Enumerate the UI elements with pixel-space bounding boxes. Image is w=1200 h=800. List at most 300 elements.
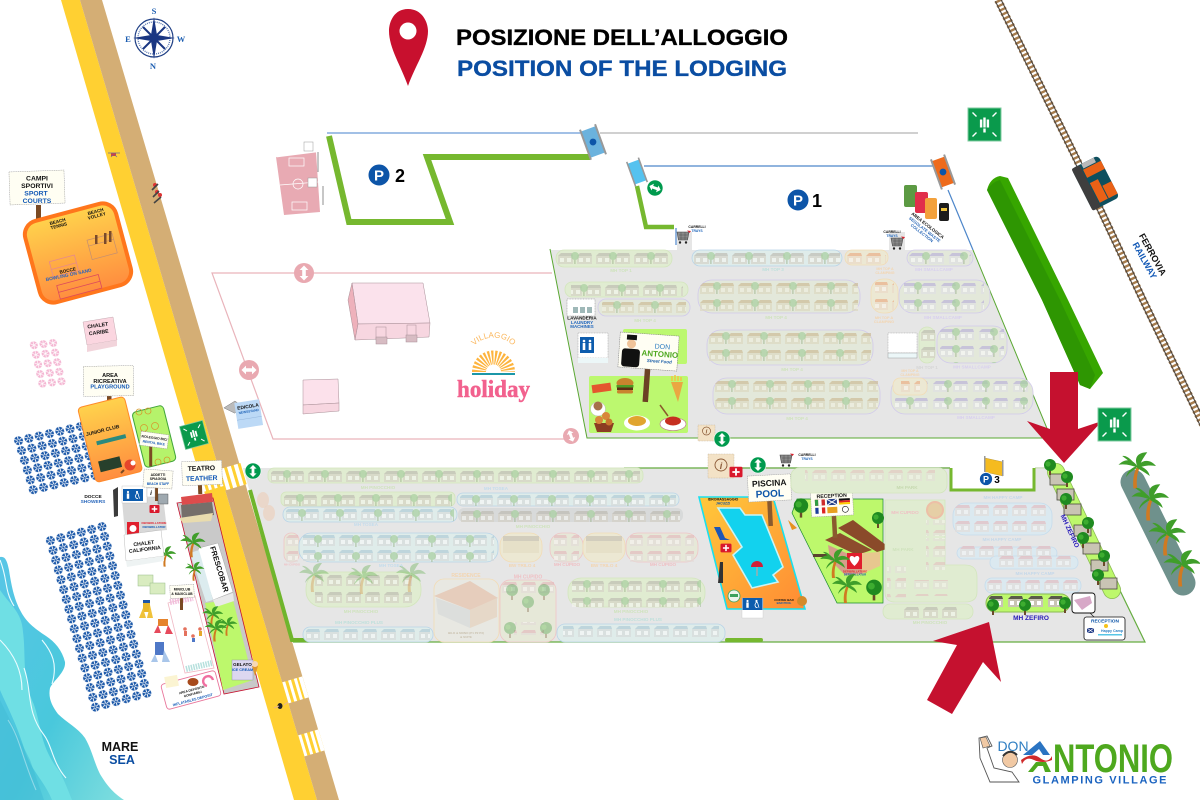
label: MH TOSEA	[484, 486, 509, 491]
fence top	[170, 598, 193, 602]
crosswalk middle	[280, 676, 309, 704]
icon: assembly point east	[1098, 408, 1131, 441]
label: railway: FERROVIA	[1137, 232, 1169, 278]
label	[900, 369, 920, 377]
pill: smallcamp north	[907, 250, 973, 266]
label: MH SMALLCAMP	[915, 267, 953, 272]
hedge: railway side	[987, 176, 1103, 389]
icon: info sign upper: i	[706, 430, 708, 436]
label: bocce: BOWLING ON SAND	[45, 268, 93, 283]
icon: first aid	[150, 505, 160, 513]
label: FRESCOBAR	[208, 545, 231, 594]
house	[813, 520, 890, 575]
trees	[794, 498, 884, 603]
crosswalk teatro	[190, 478, 223, 495]
label: beach volley: BEACH	[87, 207, 105, 216]
label: railway: RAILWAY	[1131, 241, 1159, 281]
man waving	[979, 736, 1019, 782]
icon: disabled badge	[728, 590, 740, 602]
icon: compass	[125, 6, 186, 71]
lawn	[205, 600, 253, 690]
panel: bike rental	[132, 405, 177, 468]
sign: theatre: TEATRO	[188, 465, 215, 473]
label: MH PINOCCHIO	[614, 609, 649, 614]
label: beach volley: VOLLEY	[87, 211, 106, 221]
label: sea	[102, 740, 138, 767]
label: MH CUPIDO	[891, 510, 919, 516]
pill: pinocchio south	[883, 604, 973, 619]
pill: happy camp 2	[957, 544, 1078, 570]
label: MH Zefiro: MH ZEFIRO	[1013, 615, 1049, 622]
building: chalet caribe	[83, 317, 117, 352]
road: beach promenade and tan path	[61, 0, 339, 800]
label: P1	[787, 189, 822, 211]
label: CLAMPING	[874, 320, 894, 324]
icon: drone	[108, 153, 120, 157]
sign: sport courts: CAMPI	[26, 176, 48, 182]
icon: bread basket	[594, 412, 614, 432]
icon: green arrow	[245, 463, 261, 479]
panel: sports area	[22, 200, 134, 306]
pill: pinocchio with palms	[306, 572, 421, 607]
restrooms upper	[578, 333, 608, 363]
label: MH TOSEA	[354, 522, 379, 527]
label: P2	[368, 164, 405, 186]
laundry	[567, 299, 597, 329]
label: P3: P	[983, 474, 989, 484]
sign: beach staff: BEACH STAFF	[147, 482, 169, 486]
icon: pizza	[592, 383, 611, 393]
sign: reception: RECEPTION	[816, 493, 847, 500]
pill: clamping north	[845, 250, 888, 265]
building: chalet california: CHALET	[133, 540, 156, 548]
frescobar building	[190, 543, 234, 607]
pill: clamping south	[893, 378, 927, 395]
sign: theatre	[182, 460, 223, 495]
label	[875, 267, 895, 275]
label: MH TOP A	[875, 316, 893, 320]
label: beach tennis: TENNIS	[50, 221, 68, 230]
label	[843, 570, 867, 576]
sign: Don Antonio street food: Street Food	[647, 358, 672, 365]
arrow: red down	[1027, 372, 1102, 463]
label: MH TOP 1	[610, 268, 632, 273]
sign: beach staff	[143, 469, 173, 501]
icon: cupido badge	[927, 502, 943, 518]
sign: mini club: & MAXICLUB	[171, 592, 193, 596]
icon: info sign lower: i	[720, 461, 723, 471]
label: MH CUPIDO	[514, 574, 542, 580]
label: beach volley	[86, 207, 106, 221]
label: CLAMPING	[900, 373, 920, 377]
label: defibrillator: DEFIBRILLATOR	[142, 525, 166, 529]
icon: pasta	[660, 405, 686, 430]
icon: shower heads	[113, 487, 118, 517]
icon: first aid	[730, 467, 742, 477]
lines: parking 1 perimeter	[644, 166, 973, 250]
kiosk: edicola: NEWSSTAND	[238, 408, 260, 415]
label: defibrillator: DEFIBRILLATORE	[142, 521, 167, 525]
bowling lanes	[57, 274, 102, 299]
label: ecological area	[905, 211, 946, 248]
label: junior club: JUNIOR CLUB	[85, 424, 120, 438]
residence	[434, 573, 499, 642]
icon: location pin	[389, 9, 428, 86]
icon: pink arrow west	[239, 360, 259, 380]
pill: MH TOP 1 north	[556, 250, 672, 267]
icon: slide two	[154, 619, 173, 634]
sign: pool: POOL	[755, 488, 784, 501]
label: ecological area: SEGGLATE WASTE	[908, 215, 942, 243]
label: trays: CARRELLI	[798, 453, 816, 457]
palms: beach	[155, 533, 237, 642]
sign: playground: RICREATIVA	[93, 379, 127, 385]
sign: sport courts: COURTS	[23, 198, 52, 205]
panel: street food lawn	[589, 375, 688, 433]
pill: pinocchio top	[268, 467, 643, 483]
label: trays: TRAYS	[691, 229, 703, 233]
sign: bike rental: RENTAL BIKE	[142, 439, 166, 447]
label: MH PINOCCHIO	[516, 524, 551, 529]
pill: zefiro diagonal	[1044, 459, 1117, 590]
umbrellas: blue group north	[12, 420, 102, 496]
label: MH TOP 3	[762, 267, 784, 272]
theatre	[179, 493, 214, 523]
label: trays: TRAYS	[886, 234, 898, 238]
label: MH TOP 4	[634, 318, 656, 323]
panel: inflatables: AREA DEPOSITO	[179, 685, 205, 695]
pill: tosea row 4	[299, 533, 498, 562]
label: MH SMALLCAMP	[953, 364, 991, 370]
panel: mini club	[168, 596, 214, 673]
label: MH SMALLCAMP	[924, 315, 962, 320]
label: coffee bar	[774, 598, 795, 605]
railway	[995, 0, 1200, 436]
pill: MH TOP 4 large	[698, 280, 860, 313]
tennis net	[49, 255, 79, 277]
kiosk: gelato: ICE CREAM	[232, 668, 253, 672]
laundry: LAVANDERIA	[567, 316, 597, 320]
pool water	[718, 508, 783, 588]
label: showers	[81, 494, 106, 505]
building: fresco bar area	[177, 493, 259, 694]
site: upper camping area	[550, 232, 1051, 438]
box: reception Happy Camp: RECEPTION	[1091, 618, 1120, 624]
label	[874, 316, 894, 324]
icon: green arrow	[750, 457, 766, 473]
icon: info sign lower	[708, 454, 734, 478]
pill: MH TOP 4	[598, 299, 690, 316]
label: MH PINOCCHIO	[913, 620, 948, 625]
label: showers: SHOWERS	[81, 499, 106, 505]
sign: mini club	[170, 584, 194, 610]
icon: green arrow	[714, 431, 730, 447]
icon: cyclists	[152, 183, 162, 203]
kiosk: gelato: GELATO	[233, 662, 252, 667]
panel: junior club	[78, 396, 143, 483]
kids	[183, 627, 202, 642]
pill: MH TOP 1 second	[565, 282, 688, 297]
icon: cart	[677, 230, 691, 244]
pill: BW trilo 4 west	[500, 533, 542, 562]
sign: sport courts: SPORTIVI	[21, 183, 53, 190]
building: chalet california: CALIFORNIA	[129, 545, 161, 555]
label: MH TOP A	[876, 267, 894, 271]
label: MH TOP A	[901, 369, 919, 373]
title: POSIZIONE DELL’ALLOGGIO	[456, 25, 788, 50]
pill: pinocchio row 2	[281, 490, 455, 506]
sign: Don Antonio street food: DON	[654, 343, 670, 352]
label: P1: P	[793, 192, 803, 210]
pill: MH TOP 4 mid	[707, 330, 873, 365]
logo: villaggio holiday: holiday	[457, 377, 530, 403]
label: MH PARK	[896, 485, 918, 490]
label: MH SMALLCAMP	[957, 415, 995, 420]
label: P2: P	[374, 168, 384, 184]
pill: smallcamp mid	[937, 326, 1007, 363]
label: BW TRILO 4	[591, 563, 618, 568]
pill: pinocchio plus west	[303, 626, 433, 642]
panel: food lawn	[623, 329, 687, 364]
kiosk: edicola	[223, 397, 263, 431]
icon: pink arrow north	[294, 263, 314, 283]
letter A	[1021, 741, 1052, 772]
icon: green arrow	[645, 178, 665, 198]
pill: BW trilo 4 east	[583, 533, 625, 562]
label: sea: SEA	[109, 753, 135, 767]
residence: BILO & MONO (P1 P2 P3)	[448, 631, 484, 635]
label: P1: 1	[812, 191, 822, 211]
label: sea: MARE	[102, 740, 138, 754]
title	[456, 25, 788, 81]
kiosk: gelato	[232, 660, 258, 680]
icon: compass: S	[152, 6, 157, 16]
pill: cupido east	[626, 533, 698, 562]
sign: playground: AREA	[102, 373, 118, 379]
site: lower camping area	[243, 467, 1145, 642]
icon: info sign upper	[698, 425, 715, 441]
small hedge	[725, 638, 763, 642]
sign: bike rental	[137, 431, 169, 469]
sign: Don Antonio street food	[616, 332, 680, 404]
building: chalet caribe: CHALET	[87, 321, 110, 330]
icon: compass: N	[150, 61, 157, 71]
icon: slide one	[139, 600, 153, 618]
pill: pinocchio grey	[458, 507, 683, 522]
icon: first aid	[720, 544, 732, 552]
label: ecological area: COLLECTION	[910, 223, 934, 243]
label: BW TRILO 4	[509, 563, 536, 568]
laundry: MACHINES	[570, 324, 594, 329]
panel: pool	[699, 497, 807, 609]
laundry: LAUNDRY	[571, 320, 593, 325]
pill: cupido residence	[500, 579, 556, 642]
pill: clamping	[871, 279, 898, 313]
label: MH CUPIDO	[554, 562, 581, 567]
label: MH CUPIDO	[650, 562, 677, 567]
label: jacuzzi	[708, 498, 739, 506]
lines: parking 2 perimeter	[327, 132, 918, 134]
gate: parking 1 west	[626, 157, 648, 187]
icon: defibrillator	[847, 553, 862, 569]
icon: fried plate	[624, 416, 650, 430]
label: trays	[688, 225, 706, 233]
label: ecological area: AREA ECOLOGICA	[910, 211, 946, 240]
panel: inflatables: GONFIABILI	[183, 690, 202, 698]
icon: fries	[671, 375, 683, 402]
gate: parking 3	[984, 456, 1004, 476]
icon: coffee	[590, 402, 606, 416]
label: trays: TRAYS	[801, 457, 813, 461]
sign: pool: PISCINA	[752, 477, 787, 489]
hedge: lower site west	[250, 490, 320, 640]
icon: assembly point beach	[179, 420, 209, 450]
umbrellas: pink	[28, 338, 67, 389]
icon: compass: W	[177, 34, 186, 44]
label: trays: CARRELLI	[883, 230, 901, 234]
pill: MH TOP 1 east	[919, 327, 935, 363]
foosball table	[98, 456, 122, 472]
fence bottom	[186, 663, 212, 669]
label: MH CUPIDO	[284, 562, 301, 566]
pill: MH TOP 3	[692, 250, 842, 266]
label: MH HAPPY CAMP	[1016, 571, 1054, 576]
tagline: GLAMPING VILLAGE	[1032, 774, 1168, 786]
sign: playground: PLAYGROUND	[90, 384, 130, 390]
label: trays	[883, 230, 901, 238]
icon: paddle	[121, 460, 136, 473]
label: P2: 2	[395, 166, 405, 186]
icon: assembly point top	[968, 108, 1001, 141]
building: large pink	[348, 283, 430, 344]
kiosk: edicola: EDICOLA	[237, 402, 260, 412]
ping pong table	[96, 434, 126, 445]
label: beach tennis: BEACH	[49, 217, 67, 226]
sign: sport courts: SPORT	[24, 190, 49, 198]
icon: slide three	[151, 642, 170, 662]
logo: villaggio holiday	[457, 332, 530, 403]
icon: info small: i	[150, 490, 152, 497]
football field	[276, 142, 323, 215]
label: MH TOP 1	[916, 365, 938, 370]
crosswalk lower	[296, 729, 325, 757]
sign: beach staff: SPIAGGIA	[150, 477, 167, 481]
pill: cupido tiny	[284, 533, 299, 562]
label: CLAMPING	[875, 271, 895, 275]
icon: cart	[780, 454, 794, 467]
icon: train	[1071, 155, 1119, 211]
residence: & SUITE	[460, 635, 472, 639]
icon: piazza oval	[257, 492, 275, 521]
sign: playground	[83, 366, 134, 423]
icon: fruit	[797, 596, 807, 606]
icon: happy camp reception	[1072, 593, 1098, 621]
logo: villaggio holiday: VILLAGGIO	[470, 332, 516, 344]
label: showers: DOCCE	[84, 494, 102, 500]
sign: theatre: TEATHER	[186, 475, 218, 483]
volley net	[87, 234, 117, 260]
icon: direction hand	[788, 520, 797, 530]
figure: person on beach	[274, 702, 288, 709]
gate: parking 1 east	[930, 154, 956, 190]
icon: defibrillator	[127, 522, 139, 535]
icon: cart	[891, 236, 905, 250]
building: services	[122, 486, 167, 534]
sign: sport courts	[9, 170, 65, 235]
pill: pinocchio plus east	[557, 624, 725, 642]
icon: newspaper rack	[158, 494, 168, 504]
building: small pink	[303, 379, 339, 414]
hedge: parking 1	[637, 186, 674, 227]
label: MH TOSEA	[379, 563, 404, 568]
pill: zefiro south	[986, 594, 1071, 615]
arrow: red diagonal	[927, 622, 1001, 714]
label: MH PARK	[892, 547, 914, 552]
pill: happy camp 1	[953, 503, 1052, 535]
site: holiday village outline	[212, 273, 570, 439]
panel: reception lawn	[792, 498, 890, 603]
sign: pool	[747, 474, 793, 527]
label: MH Zefiro diagonal: MH ZEFIRO	[1059, 514, 1080, 549]
hedge: parking 2	[329, 136, 590, 222]
pill: MH TOP 4 south	[713, 378, 880, 414]
label: coffee bar: BAR POOL	[777, 601, 792, 605]
icon: compass: E	[125, 34, 131, 44]
building: chalet california	[124, 530, 164, 567]
pill: MH park	[791, 468, 947, 493]
pill: cupido	[550, 533, 583, 562]
pill: smallcamp	[899, 280, 990, 313]
label: P3	[980, 472, 1000, 486]
service block: white	[888, 333, 917, 358]
label: DEFIBRILLATORE	[843, 570, 867, 574]
label: MH TOP 4	[765, 315, 787, 320]
label: MH PINOCCHIO PLUS	[335, 620, 383, 625]
label: MH HAPPY CAMP	[983, 537, 1021, 542]
pill: tosea row 3	[283, 507, 457, 522]
box: reception Happy Camp	[1084, 617, 1125, 640]
figures: volley players	[95, 231, 112, 244]
icon: waste bins	[904, 185, 949, 221]
label: P3: 3	[994, 475, 1000, 486]
don: DON	[997, 738, 1029, 754]
icon: deck chair	[714, 527, 730, 540]
sign: bike rental: NOLEGGIO BICI	[141, 434, 168, 442]
label: MH HAPPY CAMP	[984, 495, 1022, 500]
icon: info small	[147, 488, 155, 497]
sea	[0, 557, 124, 800]
label: coffee bar: COFFEE BAR	[774, 598, 795, 602]
icon: pink arrow south	[561, 426, 581, 446]
pill: happy camp 3	[985, 578, 1081, 593]
umbrellas: blue group south	[44, 520, 153, 713]
label: MH TOP 4	[781, 367, 803, 372]
pill: smallcamp south	[891, 378, 1033, 414]
panel: inflatables: INFLATABLES DEPOSIT	[172, 693, 214, 707]
label: MH PINOCCHIO PLUS	[614, 617, 662, 622]
faded palms	[299, 563, 426, 594]
sign: beach staff: ADDETTI	[151, 473, 165, 477]
building: chalet caribe: CARIBE	[89, 329, 110, 337]
title: POSITION OF THE LODGING	[457, 56, 787, 81]
sign: reception	[810, 490, 855, 539]
pill: pinocchio east	[568, 577, 705, 607]
panel: inflatables	[161, 670, 221, 710]
label: trays: CARRELLI	[688, 225, 706, 229]
label: DEFIBRILLATOR	[844, 572, 866, 576]
label: trays	[798, 453, 816, 461]
label: defibrillator	[142, 521, 167, 529]
